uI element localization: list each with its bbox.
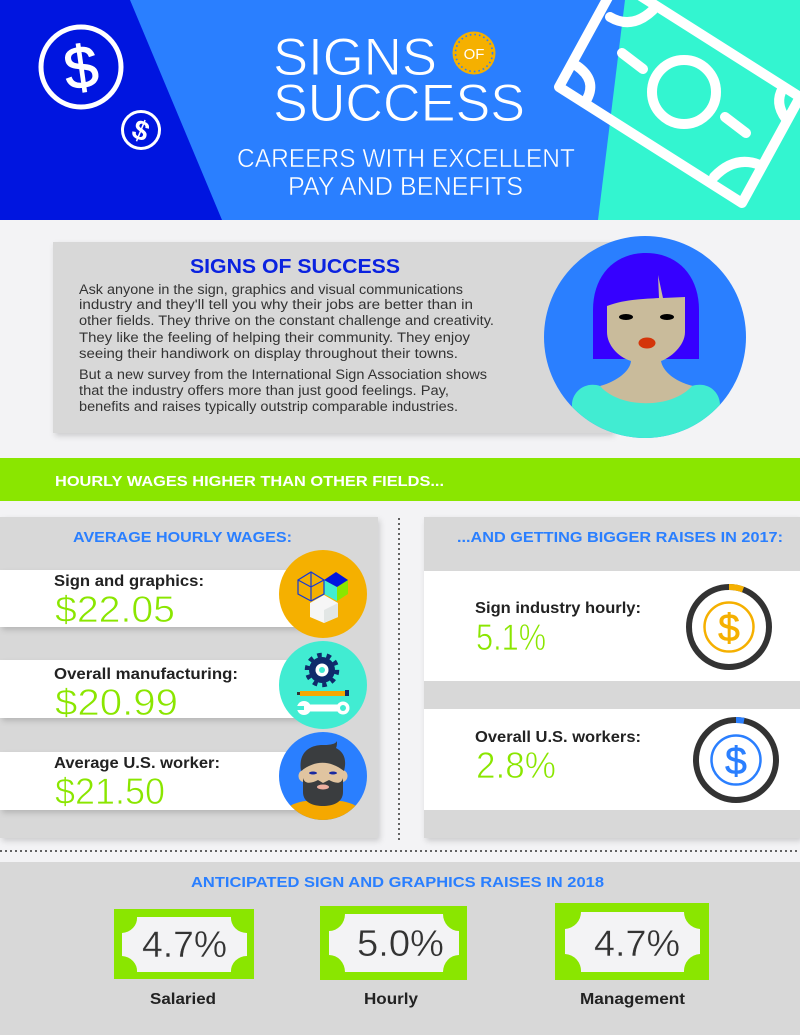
row: average US worker: $21.50 [55,771,165,812]
intro heading: SIGNS OF SUCCESS [190,256,400,278]
wages heading: AVERAGE HOURLY WAGES: [73,529,292,546]
bill: salaried [114,909,254,1008]
row: sign industry hourly: Sign industry hourly: [475,600,641,617]
icon: OF coin: OF [464,46,484,63]
row: overall US workers [424,709,800,810]
title [273,28,525,133]
title: SIGNS [273,28,437,87]
intro text: seeing their handiwork on display throughout their towns. [79,346,458,361]
subtitle [237,145,575,201]
row: sign and graphics: $22.05 [55,589,175,630]
row: overall US workers: Overall U.S. workers: [475,729,641,746]
intro text: They like the feeling of helping their community. They enjoy [79,330,470,345]
panel: raises 2017 [424,517,800,838]
icon: OF coin [452,32,496,74]
intro text: that the industry offers more than just good feelings. Pay, [79,383,449,398]
icon: orange coin ring [689,587,769,667]
intro text: But a new survey from the International Sign Association shows [79,367,487,382]
icon: orange coin ring: $ [718,607,740,650]
row: sign and graphics: Sign and graphics: [54,573,204,590]
intro text [79,282,494,414]
bill: salaried: 4.7% [142,924,227,965]
row: average US worker: Average U.S. worker: [54,755,220,772]
green banner: HOURLY WAGES HIGHER THAN OTHER FIELDS... [55,473,444,490]
row: overall US workers: 2.8% [476,745,556,786]
intro text: Ask anyone in the sign, graphics and visual communications [79,282,463,297]
row: overall manufacturing: Overall manufacturing: [54,666,238,683]
icon: blue coin ring: $ [725,740,747,783]
row: sign industry hourly: 5.1% [476,617,546,658]
row: overall manufacturing: $20.99 [55,682,178,723]
row: average US worker [0,752,312,812]
bill: salaried: Salaried [150,991,216,1008]
bill: hourly: 5.0% [357,923,444,964]
subtitle: CAREERS WITH EXCELLENT [237,145,575,173]
intro text: benefits and raises typically outstrip comparable industries. [79,399,458,414]
icon: blue coin ring [696,720,776,800]
icon: large dollar coin: $ [60,32,102,103]
icon: dollar bill outline [559,0,800,203]
icon: cubes [279,550,367,638]
title: SUCCESS [273,74,525,133]
bill: management: Management [580,991,685,1008]
raises 2018 heading: ANTICIPATED SIGN AND GRAPHICS RAISES IN 2018 [191,874,604,891]
bill: management [555,903,709,1008]
green banner [0,458,800,501]
bill: hourly [320,906,467,1008]
panel: average hourly wages [0,517,378,838]
intro text: industry and they'll tell you why their jobs are better than in [79,297,473,312]
subtitle: PAY AND BENEFITS [288,173,523,201]
icon: bearded man [279,732,367,825]
panel: introduction [53,236,746,445]
panel: anticipated raises 2018 [0,862,800,1035]
icon: woman portrait [544,236,746,445]
row: sign and graphics [0,570,312,630]
icon: large dollar coin [41,27,121,107]
header banner [0,0,800,220]
row: overall manufacturing [0,660,312,723]
intro text: other fields. They thrive on the constant challenge and creativity. [79,313,494,328]
bill: management: 4.7% [594,923,680,964]
row: sign industry hourly [424,571,800,681]
raises heading: ...AND GETTING BIGGER RAISES IN 2017: [457,529,783,546]
icon: small dollar coin [122,112,160,148]
icon: small dollar coin: $ [128,113,154,148]
icon: tools [279,641,367,729]
bill: hourly: Hourly [364,991,418,1008]
